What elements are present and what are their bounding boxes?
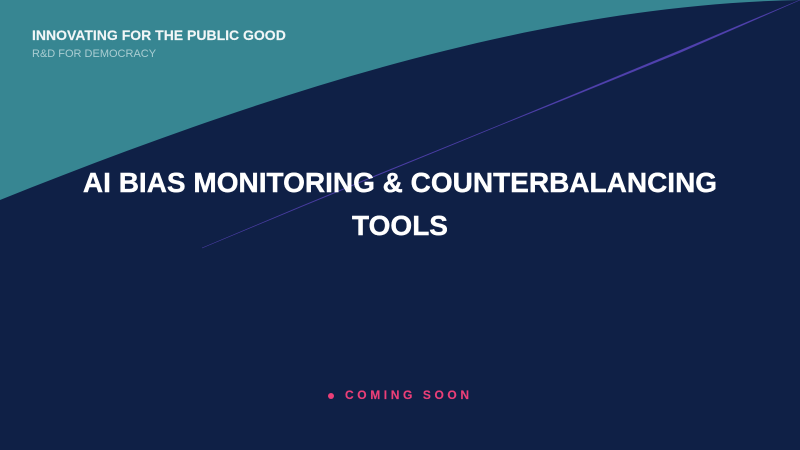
header: subtitle: R&D FOR DEMOCRACY (32, 48, 156, 60)
main title: AI BIAS MONITORING & COUNTERBALANCING (83, 167, 717, 198)
status dot (328, 393, 334, 399)
teal swoosh (0, 0, 800, 200)
header: organization name: INNOVATING FOR THE PUBLIC GOOD (32, 27, 286, 43)
status label: COMING SOON (345, 388, 473, 402)
main title: TOOLS (352, 210, 448, 241)
status: coming soon (328, 388, 473, 402)
main title (83, 167, 717, 241)
purple streak (202, 0, 800, 248)
